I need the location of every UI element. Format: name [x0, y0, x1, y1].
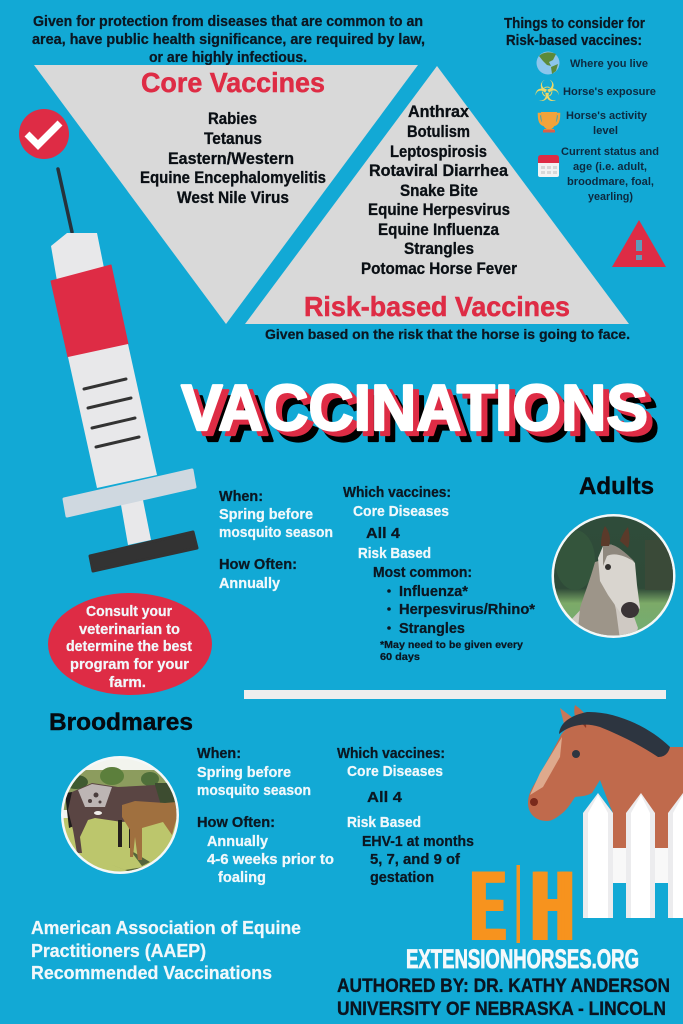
panel: broodmares when and how often: Annually: [207, 834, 268, 850]
logo: E|H: E: [476, 850, 508, 961]
list: core vaccines: Equine Encephalomyelitis: [140, 169, 326, 187]
panel: things to consider: [504, 16, 659, 203]
illustration: syringe: [51, 169, 197, 571]
icon: calendar: [538, 155, 559, 177]
heading: adults: Adults: [579, 473, 654, 500]
list: risk-based vaccines: Equine Influenza: [378, 221, 500, 239]
logo: E|H: E: [474, 850, 506, 961]
panel: adults which vaccines: Most common:: [373, 565, 472, 581]
heading: things to consider: [504, 16, 645, 49]
panel: broodmares when and how often: foaling: [218, 870, 266, 886]
consideration labels: yearling): [588, 191, 633, 203]
photo: broodmare and foal: [60, 755, 180, 875]
title: vaccinations: VACCINATIONS: [192, 382, 659, 455]
consideration labels: age (i.e. adult,: [573, 161, 647, 173]
panel: adults when and how often: mosquito season: [219, 525, 333, 541]
panel: broodmares which vaccines: Risk Based: [347, 815, 421, 831]
heading: things to consider: Things to consider for: [504, 16, 645, 32]
author credit: [337, 976, 670, 1020]
list: risk-based vaccines: Equine Herpesvirus: [368, 201, 510, 219]
panel: adults which vaccines: Influenza*: [399, 584, 468, 600]
panel: adults which vaccines: Strangles: [399, 621, 465, 637]
panel: adults which vaccines: Core Diseases: [353, 504, 449, 520]
heading: broodmares: Broodmares: [49, 709, 193, 736]
consideration labels: Horse's activity: [566, 110, 648, 122]
list: risk-based vaccines: [361, 103, 518, 278]
panel: core vaccines triangle: [34, 65, 418, 324]
panel: risk-based vaccines triangle: [245, 66, 629, 324]
list: risk-based vaccines: Potomac Horse Fever: [361, 260, 518, 278]
list: risk-based vaccines: Leptospirosis: [390, 143, 487, 161]
panel: broodmares which vaccines: gestation: [370, 870, 434, 886]
icon: globe: [536, 52, 560, 74]
source note: AAEP: Recommended Vaccinations: [31, 962, 272, 983]
source note: AAEP: American Association of Equine: [31, 917, 301, 938]
list: risk-based vaccines: Rotaviral Diarrhea: [369, 162, 509, 180]
icon: trophy: [539, 112, 559, 132]
heading: risk-based vaccines: Risk-based Vaccines: [304, 291, 570, 322]
callout: consult your veterinarian: farm.: [109, 675, 146, 691]
panel: broodmares when and how often: When:: [197, 746, 241, 762]
illustration: horse behind fence: [528, 705, 683, 918]
intro text: core vaccines description: Given for protection from diseases that are common to an: [33, 14, 423, 30]
list: risk-based vaccines: Strangles: [404, 240, 474, 258]
consideration labels: broodmare, foal,: [567, 176, 654, 188]
consideration labels: Where you live: [570, 58, 648, 70]
heading: core vaccines: Core Vaccines: [141, 67, 325, 98]
panel: adults when and how often: When:: [219, 489, 263, 505]
panel: broodmares which vaccines: Which vaccines:: [337, 746, 445, 762]
logo: E|H: H: [534, 850, 574, 961]
consideration labels: [561, 58, 659, 203]
logo: E|H: H: [529, 850, 569, 961]
callout: consult your veterinarian: [48, 593, 212, 695]
callout: consult your veterinarian: Consult your: [86, 604, 172, 620]
panel: adults when and how often: How Often:: [219, 557, 297, 573]
panel: broodmares which vaccines: 5, 7, and 9 of: [370, 852, 460, 868]
panel: adults which vaccines: All 4: [366, 526, 400, 542]
title: vaccinations: VACCINATIONS: [181, 371, 648, 444]
panel: broodmares when and how often: Spring before: [197, 765, 291, 781]
photo: adult horse: [552, 514, 676, 640]
logo: E|H: E: [469, 850, 501, 961]
list: core vaccines: Rabies: [208, 110, 257, 128]
panel: broodmares which vaccines: EHV-1 at months: [362, 834, 474, 850]
panel: broodmares which vaccines: All 4: [367, 790, 402, 806]
source note: AAEP: [31, 917, 301, 983]
panel: adults which vaccines: Risk Based: [358, 546, 431, 562]
callout: consult your veterinarian: veterinarian to: [79, 622, 180, 638]
panel: adults which vaccines: [343, 485, 535, 663]
panel: adults when and how often: Spring before: [219, 507, 313, 523]
logo: E|H: E: [471, 850, 503, 961]
panel: broodmares which vaccines: Core Diseases: [347, 764, 443, 780]
panel: adults which vaccines: Which vaccines:: [343, 485, 451, 501]
icon: biohazard: ☣: [534, 74, 560, 108]
panel: broodmares when and how often: mosquito season: [197, 783, 311, 799]
logo: E|H: [469, 850, 576, 961]
panel: adults which vaccines: 60 days: [380, 651, 420, 663]
intro text: core vaccines description: [32, 14, 425, 66]
consideration labels: level: [593, 125, 618, 137]
icon: warning triangle: [612, 220, 666, 267]
list: core vaccines: Tetanus: [204, 130, 262, 148]
logo: E|H: H: [531, 850, 571, 961]
panel: broodmares when and how often: 4-6 weeks prior to: [207, 852, 334, 868]
panel: broodmares when and how often: [197, 746, 334, 886]
panel: broodmares which vaccines: [337, 746, 474, 886]
list: risk-based vaccines: Snake Bite: [400, 182, 478, 200]
panel: broodmares when and how often: How Often:: [197, 815, 275, 831]
panel: adults when and how often: Annually: [219, 576, 280, 592]
callout: consult your veterinarian: program for your: [70, 657, 189, 673]
consideration labels: Horse's exposure: [563, 86, 656, 98]
list: core vaccines: Eastern/Western: [168, 150, 294, 168]
intro text: core vaccines description: or are highly infectious.: [149, 50, 307, 66]
panel: adults which vaccines: Herpesvirus/Rhino*: [399, 602, 535, 618]
list: core vaccines: [140, 110, 326, 207]
panel: adults which vaccines: *May need to be given every: [380, 639, 523, 651]
caption: risk-based description: Given based on the risk that the horse is going to face.: [265, 326, 630, 342]
heading: things to consider: Risk-based vaccines:: [506, 33, 642, 49]
callout: consult your veterinarian: determine the best: [66, 639, 192, 655]
logo: E|H: H: [536, 850, 576, 961]
icon: check mark badge: [19, 109, 69, 159]
consideration labels: Current status and: [561, 146, 659, 158]
list: risk-based vaccines: Botulism: [407, 123, 470, 141]
panel: adults when and how often: [219, 489, 333, 592]
list: risk-based vaccines: Anthrax: [408, 103, 470, 121]
list: core vaccines: West Nile Virus: [177, 189, 289, 207]
intro text: core vaccines description: area, have public health significance, are required by law,: [32, 32, 425, 48]
title: vaccinations: VACCINATIONS: [187, 376, 654, 449]
source note: AAEP: Practitioners (AAEP): [31, 940, 206, 961]
